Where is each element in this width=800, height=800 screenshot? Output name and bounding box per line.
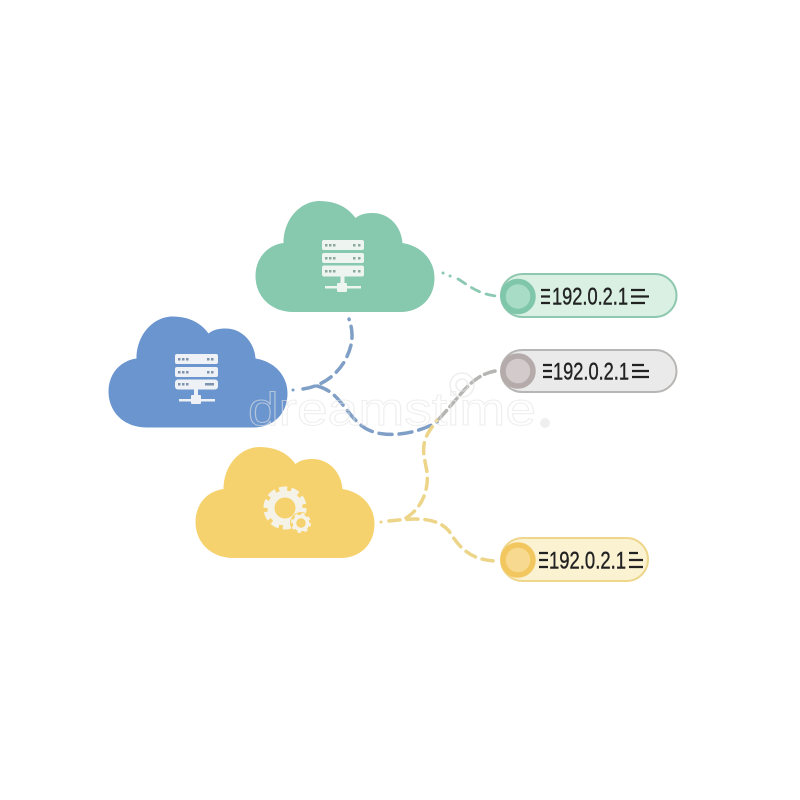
list marks bbox=[543, 365, 649, 377]
connector: yellow cloud to gray and yellow pills bbox=[381, 420, 496, 561]
pill: green IP address bbox=[501, 274, 676, 317]
pill: gray IP address bbox=[501, 350, 676, 392]
pill indicator bbox=[503, 282, 533, 312]
connector: blue cloud to green cloud and gray line bbox=[293, 319, 437, 434]
list marks bbox=[541, 290, 649, 303]
icon: server rack bbox=[175, 354, 218, 404]
list marks bbox=[539, 553, 643, 567]
watermark: dreamstime bbox=[248, 383, 536, 435]
pill: yellow IP address bbox=[501, 538, 648, 581]
icon: gears bbox=[266, 489, 312, 534]
connector: gray pill line bbox=[437, 371, 495, 421]
pill indicator bbox=[503, 356, 533, 386]
watermark bbox=[248, 373, 550, 435]
cloud: green server bbox=[256, 201, 434, 312]
cloud: blue server bbox=[108, 316, 288, 428]
IP label: 192.0.2.1 bbox=[553, 358, 629, 386]
IP label: 192.0.2.1 bbox=[552, 284, 628, 310]
icon: server rack bbox=[322, 240, 364, 292]
connector: green cloud to green pill bbox=[443, 273, 496, 296]
cloud: yellow gears bbox=[196, 447, 374, 558]
IP label: 192.0.2.1 bbox=[549, 548, 626, 574]
pill indicator bbox=[503, 545, 533, 575]
